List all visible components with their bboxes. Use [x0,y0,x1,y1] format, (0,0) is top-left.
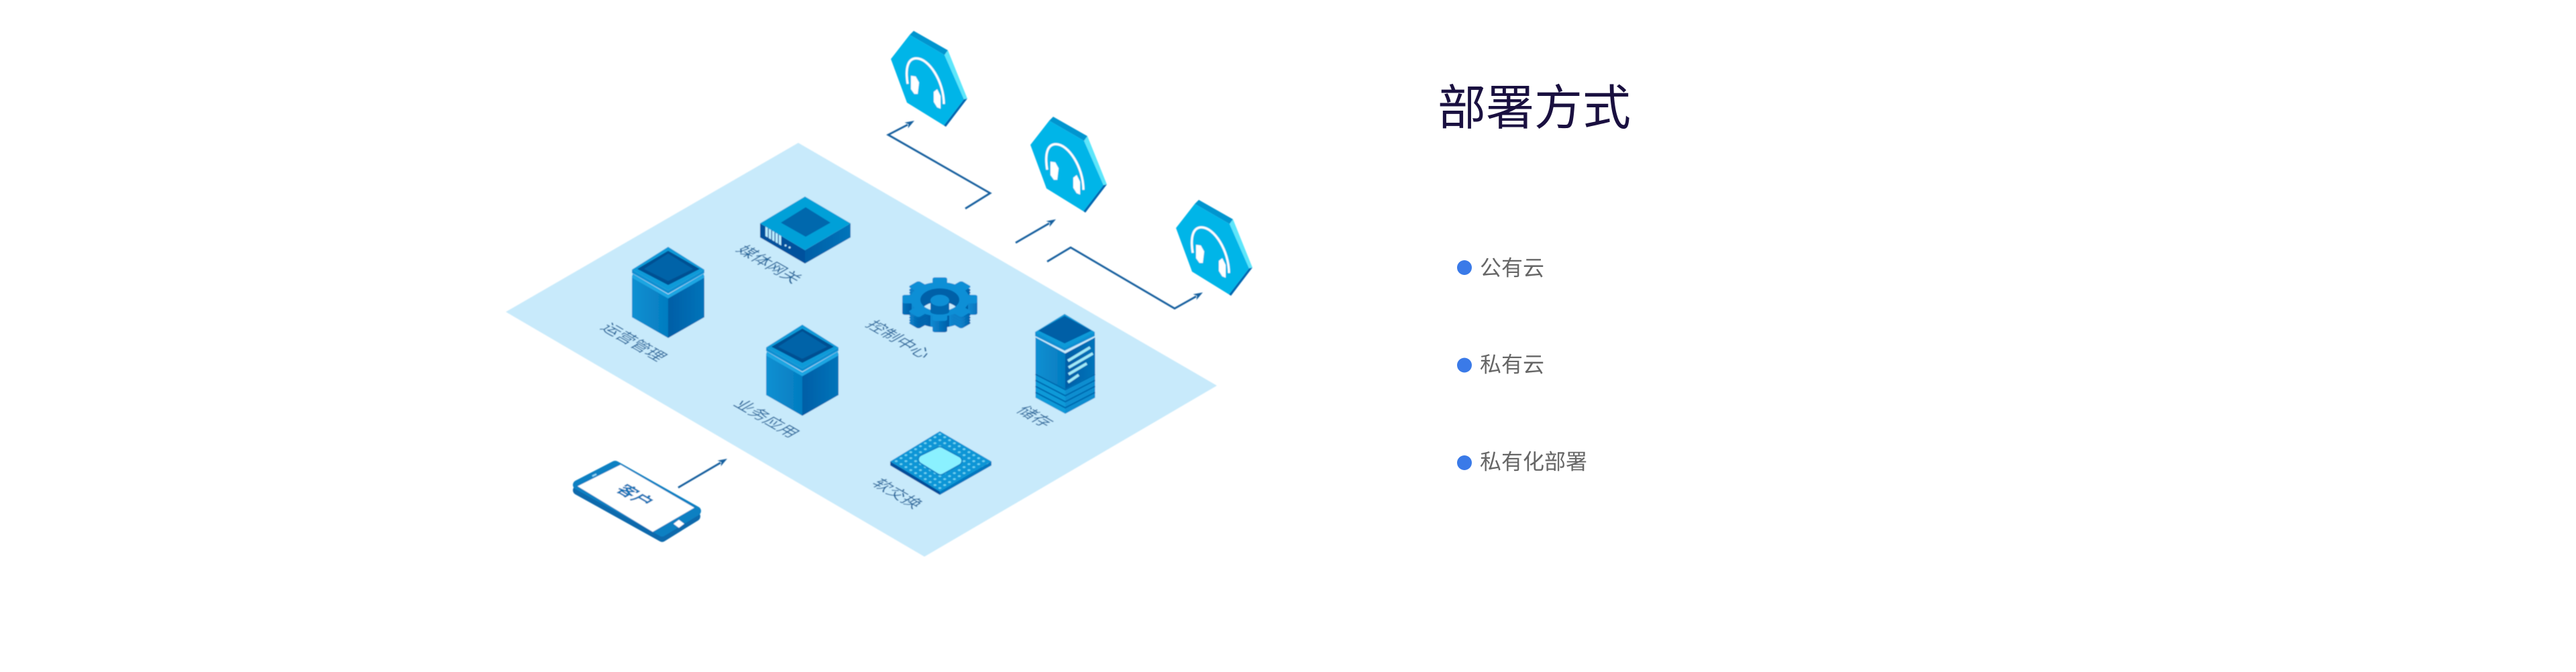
icon: soft switch chip [890,431,991,495]
icon: headset hexagon 1 [891,31,967,127]
phone label: 客户: 客户 [611,482,659,509]
illustration: isometric deployment diagram [506,31,1252,557]
icon: headset hexagon 2 [1030,117,1107,213]
icon: storage tower [1035,314,1095,414]
label: 业务应用: 业务应用 [729,398,804,440]
icon: business application server block [766,325,839,416]
label: 媒体网关: 媒体网关 [732,243,806,286]
label: 软交换: 软交换 [867,477,927,511]
arrow: platform to headset 1 [888,121,990,209]
arrow: platform to headset 2 [1016,219,1056,243]
label: 储存: 储存 [1012,404,1057,430]
list item: private deployment: 私有化部署 [1480,449,1587,473]
icon: operations server block [632,247,704,338]
label: 控制中心: 控制中心 [861,319,936,361]
arrow: client to platform [678,459,727,488]
label: 运营管理: 运营管理 [596,321,671,363]
list item: public cloud: 公有云 [1480,256,1544,280]
title: 部署方式 [1438,82,1631,135]
list item: private cloud: 私有云 [1480,353,1544,377]
arrow: platform to headset 3 [1047,247,1203,309]
floor platform [506,143,1217,557]
icon: media gateway box [760,197,851,264]
icon: control center gear [902,278,977,332]
icon: client phone [578,465,696,537]
icon: headset hexagon 3 [1176,200,1252,296]
